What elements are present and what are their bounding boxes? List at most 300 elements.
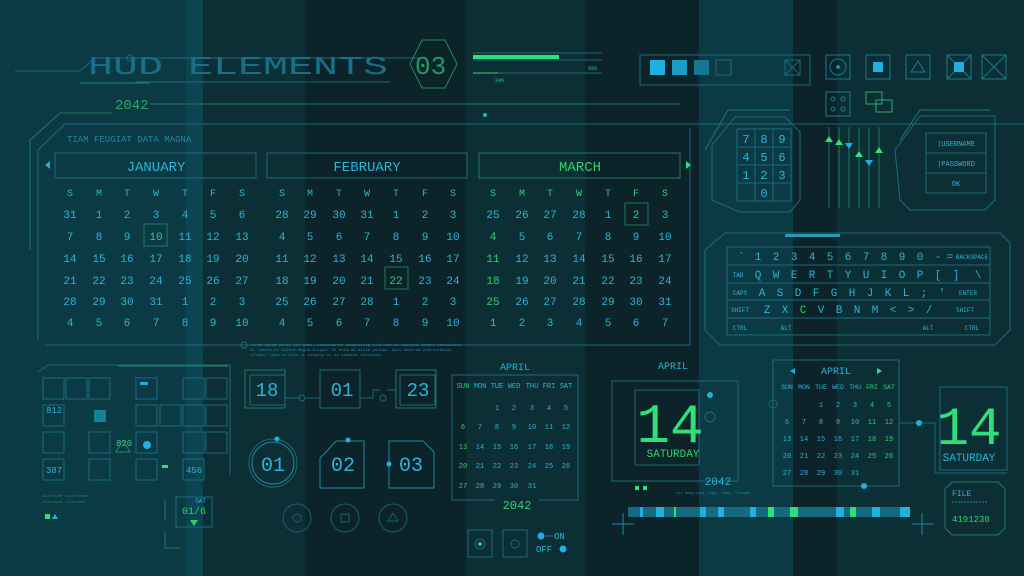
april calendar right: 19 bbox=[885, 436, 893, 444]
keyboard: 2 bbox=[773, 252, 779, 264]
april mini calendar center: 24 bbox=[528, 463, 536, 471]
april calendar right: 2 bbox=[836, 402, 840, 410]
day grid text: 15 bbox=[601, 254, 615, 266]
day grid text: 5 bbox=[307, 318, 313, 330]
day grid text: 25 bbox=[486, 297, 500, 309]
title: 03 bbox=[415, 52, 446, 82]
april mini calendar center: SAT bbox=[560, 383, 572, 391]
day grid text: 26 bbox=[515, 210, 529, 222]
keyboard: ALT bbox=[781, 325, 792, 332]
day grid text: 11 bbox=[178, 232, 192, 244]
keyboard: ` bbox=[738, 251, 744, 264]
keyboard: \ bbox=[975, 270, 981, 282]
day grid text: 1 bbox=[490, 318, 497, 330]
april mini calendar center: 22 bbox=[493, 463, 501, 471]
keypad: 2 bbox=[760, 169, 768, 183]
day grid text: 23 bbox=[629, 276, 643, 288]
day grid text: 1 bbox=[393, 297, 400, 309]
day grid text: 26 bbox=[303, 297, 317, 309]
grid panel bottom-left: #include <iostream> bbox=[43, 494, 89, 499]
keypad: 3 bbox=[778, 169, 786, 183]
sliders bbox=[825, 127, 883, 208]
day grid text: W bbox=[576, 189, 582, 200]
keypad bbox=[705, 110, 800, 212]
day grid text: 26 bbox=[515, 297, 529, 309]
day grid text: 27 bbox=[543, 297, 557, 309]
grid panel bottom-left: 820 bbox=[116, 439, 132, 449]
day grid text: 7 bbox=[364, 318, 370, 330]
date panel 14 saturday right: SATURDAY bbox=[943, 453, 996, 465]
april mini calendar center: FRI bbox=[543, 383, 555, 391]
day grid text: 8 bbox=[393, 318, 399, 330]
keyboard: P bbox=[917, 270, 924, 282]
file box bbox=[945, 482, 1005, 535]
april mini calendar center: WED bbox=[508, 383, 520, 391]
day grid text: 16 bbox=[120, 254, 134, 266]
keypad: 9 bbox=[778, 133, 786, 147]
grid panel bottom-left: 387 bbox=[46, 466, 62, 476]
keyboard: ENTER bbox=[959, 290, 977, 297]
date widget SAT 01/6: SAT bbox=[195, 498, 206, 505]
keyboard: W bbox=[773, 270, 780, 282]
april mini calendar center: 15 bbox=[493, 444, 501, 452]
day grid text: 10 bbox=[658, 232, 672, 244]
keyboard: ; bbox=[921, 288, 927, 300]
day grid text: 18 bbox=[486, 276, 500, 288]
april calendar right: WED bbox=[832, 384, 844, 391]
keyboard bbox=[705, 233, 1010, 345]
day grid text: 2 bbox=[124, 210, 130, 222]
day grid text: 25 bbox=[178, 276, 192, 288]
day grid text: 27 bbox=[235, 276, 249, 288]
barcode strip bbox=[612, 507, 934, 535]
day grid text: S bbox=[662, 189, 668, 200]
april calendar right: 21 bbox=[800, 453, 808, 461]
april calendar right: 8 bbox=[819, 419, 823, 427]
day grid text: 9 bbox=[422, 318, 428, 330]
keyboard: ' bbox=[939, 288, 945, 300]
day grid text: 25 bbox=[275, 297, 289, 309]
day grid text: 18 bbox=[178, 254, 192, 266]
year label 2042: 2042 bbox=[115, 98, 149, 114]
keyboard: 5 bbox=[827, 252, 833, 264]
month headers bbox=[55, 153, 680, 178]
april calendar right: 16 bbox=[834, 436, 842, 444]
calendar panel: three months bbox=[45, 128, 691, 345]
month headers: FEBRUARY bbox=[333, 160, 401, 176]
day grid text bbox=[63, 189, 672, 330]
day grid text: 11 bbox=[275, 254, 289, 266]
day grid text: 10 bbox=[446, 232, 460, 244]
highlight boxes bbox=[144, 203, 648, 289]
april calendar right: 26 bbox=[885, 453, 893, 461]
login panel: |PASSWORD bbox=[937, 161, 975, 169]
day grid text: 7 bbox=[364, 232, 370, 244]
april calendar right: 30 bbox=[834, 470, 842, 478]
april calendar right: 18 bbox=[868, 436, 876, 444]
keyboard: CAPS bbox=[733, 290, 748, 297]
day grid text: 15 bbox=[389, 254, 403, 266]
day grid text: 29 bbox=[92, 297, 106, 309]
day grid text: 30 bbox=[629, 297, 643, 309]
keyboard: E bbox=[791, 270, 798, 282]
keyboard: / bbox=[926, 305, 932, 317]
april mini calendar center: 13 bbox=[459, 444, 467, 452]
toggle ON OFF bbox=[468, 530, 566, 557]
login panel: |USERNAME bbox=[937, 141, 975, 149]
date panel 14 saturday left: SATURDAY bbox=[647, 449, 700, 461]
april calendar right: 13 bbox=[783, 436, 791, 444]
day grid text: 30 bbox=[120, 297, 134, 309]
day grid text: 5 bbox=[307, 232, 313, 244]
day grid text: 3 bbox=[662, 210, 668, 222]
day grid text: 17 bbox=[149, 254, 163, 266]
day grid text: 4 bbox=[279, 232, 286, 244]
date panel 14 saturday left: APRIL bbox=[658, 362, 688, 373]
day grid text: 8 bbox=[605, 232, 611, 244]
day grid text: 9 bbox=[124, 232, 130, 244]
day grid text: M bbox=[519, 189, 525, 200]
day grid text: 1 bbox=[182, 297, 189, 309]
day grid text: 9 bbox=[422, 232, 428, 244]
day grid text: M bbox=[96, 189, 102, 200]
keyboard: BACKSPACE bbox=[956, 254, 989, 261]
day grid text: 22 bbox=[389, 276, 403, 288]
april mini calendar center: 27 bbox=[459, 483, 467, 491]
day grid text: 21 bbox=[360, 276, 374, 288]
title bbox=[15, 40, 457, 88]
keypad: 5 bbox=[760, 151, 768, 165]
grid panel bottom-left bbox=[38, 365, 230, 519]
keyboard: J bbox=[867, 288, 873, 300]
time boxes 18 01 23: 18 bbox=[256, 380, 278, 402]
day grid text: 19 bbox=[206, 254, 220, 266]
day grid text: 8 bbox=[393, 232, 399, 244]
april mini calendar center: 18 bbox=[545, 444, 553, 452]
toggle ON OFF: OFF bbox=[536, 545, 552, 555]
keyboard: H bbox=[849, 288, 855, 300]
day grid text: 31 bbox=[360, 210, 374, 222]
grid panel bottom-left: #include <fstream> bbox=[43, 500, 87, 505]
april calendar right bbox=[769, 360, 899, 489]
april mini calendar center: TUE bbox=[491, 383, 503, 391]
day grid text: S bbox=[279, 189, 285, 200]
day grid text: 8 bbox=[182, 318, 188, 330]
day grid text: 3 bbox=[450, 210, 456, 222]
day grid text: 24 bbox=[149, 276, 163, 288]
keyboard: B bbox=[836, 305, 843, 317]
keyboard: CTRL bbox=[733, 325, 748, 332]
keyboard: F bbox=[813, 288, 819, 300]
april calendar right: 23 bbox=[834, 453, 842, 461]
day grid text: 13 bbox=[332, 254, 346, 266]
day grid text: 14 bbox=[360, 254, 374, 266]
keyboard: X bbox=[782, 305, 789, 317]
day grid text: 4 bbox=[576, 318, 583, 330]
date widget SAT 01/6: 01/6 bbox=[182, 506, 206, 518]
day grid text: 20 bbox=[543, 276, 557, 288]
day grid text: 7 bbox=[576, 232, 582, 244]
keyboard: Q bbox=[755, 270, 762, 282]
day grid text: 31 bbox=[658, 297, 672, 309]
april calendar right: SUN bbox=[781, 384, 793, 391]
april mini calendar center: APRIL bbox=[500, 363, 530, 374]
april calendar right: 14 bbox=[800, 436, 808, 444]
day grid text: 10 bbox=[235, 318, 249, 330]
april calendar right: 17 bbox=[851, 436, 859, 444]
april mini calendar center: 14 bbox=[476, 444, 484, 452]
day grid text: 24 bbox=[446, 276, 460, 288]
keyboard: 0 bbox=[917, 252, 923, 264]
april calendar right: 27 bbox=[783, 470, 791, 478]
day grid text: 7 bbox=[67, 232, 73, 244]
lorem text block: ullamco laboris nisi ut aliquip ex ea commodo consequat bbox=[250, 353, 382, 358]
feb: 28 bbox=[275, 210, 289, 222]
day grid text: 6 bbox=[336, 318, 342, 330]
day grid text: 13 bbox=[235, 232, 249, 244]
keyboard: Z bbox=[764, 305, 771, 317]
day grid text: 26 bbox=[206, 276, 220, 288]
counters 01 02 03: 03 bbox=[399, 455, 423, 478]
day grid text: W bbox=[364, 189, 370, 200]
day grid text: 17 bbox=[658, 254, 672, 266]
day grid text: 3 bbox=[450, 297, 456, 309]
day grid text: 28 bbox=[572, 297, 586, 309]
day grid text: 17 bbox=[446, 254, 460, 266]
keyboard: I bbox=[881, 270, 887, 282]
day grid text: S bbox=[490, 189, 496, 200]
progress bars bbox=[473, 53, 602, 84]
day grid text: 3 bbox=[153, 210, 159, 222]
grid panel bottom-left: 456 bbox=[186, 466, 202, 476]
day grid text: F bbox=[210, 189, 216, 200]
month headers: MARCH bbox=[559, 160, 601, 176]
keypad: 1 bbox=[742, 169, 750, 183]
day grid text: 4 bbox=[490, 232, 497, 244]
day grid text: 21 bbox=[572, 276, 586, 288]
april calendar right: 29 bbox=[817, 470, 825, 478]
day grid text: T bbox=[124, 189, 130, 200]
april mini calendar center: 30 bbox=[510, 483, 518, 491]
day grid text: 12 bbox=[303, 254, 317, 266]
calendar panel: three months: TIAM FEUGIAT DATA MAGNA bbox=[67, 135, 192, 145]
time boxes 18 01 23 bbox=[245, 370, 436, 408]
day grid text: 27 bbox=[543, 210, 557, 222]
file box: 4191230 bbox=[952, 515, 990, 525]
day grid text: 1 bbox=[605, 210, 612, 222]
day grid text: 23 bbox=[418, 276, 432, 288]
april calendar right: 24 bbox=[851, 453, 859, 461]
keyboard: = bbox=[947, 252, 953, 264]
day grid text: 2 bbox=[422, 210, 428, 222]
april mini calendar center: 21 bbox=[476, 463, 484, 471]
april mini calendar center: 28 bbox=[476, 483, 484, 491]
keyboard: - bbox=[935, 252, 941, 264]
day grid text: T bbox=[547, 189, 553, 200]
day grid text: 6 bbox=[633, 318, 639, 330]
login panel bbox=[895, 110, 995, 210]
day grid text: 4 bbox=[182, 210, 189, 222]
day grid text: 14 bbox=[63, 254, 77, 266]
keyboard: TAB bbox=[733, 272, 744, 279]
day grid text: 29 bbox=[601, 297, 615, 309]
keyboard: 9 bbox=[899, 252, 905, 264]
april mini calendar center: 8 bbox=[495, 424, 499, 432]
keyboard: N bbox=[854, 305, 860, 317]
april calendar right: 12 bbox=[885, 419, 893, 427]
keyboard: 8 bbox=[881, 252, 887, 264]
day grid text: 6 bbox=[124, 318, 130, 330]
keypad: 4 bbox=[742, 151, 750, 165]
april mini calendar center: 26 bbox=[562, 463, 570, 471]
day grid text: 2 bbox=[422, 297, 428, 309]
day grid text: 18 bbox=[275, 276, 289, 288]
day grid text: 14 bbox=[572, 254, 586, 266]
day grid text: 28 bbox=[63, 297, 77, 309]
day grid text: W bbox=[153, 189, 159, 200]
toggle ON OFF: ON bbox=[554, 532, 565, 542]
day grid text: 7 bbox=[662, 318, 668, 330]
april mini calendar center: 2042 bbox=[503, 499, 531, 513]
april mini calendar center: 16 bbox=[510, 444, 518, 452]
april mini calendar center: 25 bbox=[545, 463, 553, 471]
april mini calendar center bbox=[452, 363, 578, 513]
day grid text: 5 bbox=[96, 318, 102, 330]
day grid text: 15 bbox=[92, 254, 106, 266]
day grid text: 1 bbox=[96, 210, 103, 222]
april mini calendar center: 23 bbox=[510, 463, 518, 471]
day grid text: 19 bbox=[515, 276, 529, 288]
april calendar right: 31 bbox=[851, 470, 859, 478]
keyboard: S bbox=[777, 288, 784, 300]
april calendar right: 10 bbox=[851, 419, 859, 427]
keyboard: 6 bbox=[845, 252, 851, 264]
keyboard: SHIFT bbox=[956, 307, 974, 314]
day grid text: 10 bbox=[446, 318, 460, 330]
april calendar right: 9 bbox=[836, 419, 840, 427]
day grid text: 6 bbox=[239, 210, 245, 222]
keyboard: CTRL bbox=[965, 325, 980, 332]
day grid text: 2 bbox=[519, 318, 525, 330]
date panel 14 saturday left: 2042 bbox=[705, 477, 731, 489]
lorem text block: Lorem ipsum dolor sit amet, consectetur adipiscing elit sed do eiusmod tempor incididunt bbox=[250, 343, 461, 348]
day grid text: 5 bbox=[519, 232, 525, 244]
april mini calendar center: 19 bbox=[562, 444, 570, 452]
keyboard: [ bbox=[935, 270, 941, 282]
day grid text: T bbox=[336, 189, 342, 200]
april mini calendar center: 9 bbox=[512, 424, 516, 432]
progress bars: 24% bbox=[495, 78, 504, 84]
keyboard: D bbox=[795, 288, 802, 300]
keypad: 8 bbox=[760, 133, 768, 147]
year label 2042 bbox=[30, 98, 1024, 340]
day grid text: 30 bbox=[332, 210, 346, 222]
keypad: 0 bbox=[760, 187, 768, 201]
april mini calendar center: THU bbox=[526, 383, 538, 391]
round icons bbox=[283, 504, 407, 532]
keyboard: 4 bbox=[809, 252, 816, 264]
progress bars: 59% bbox=[588, 66, 597, 72]
april mini calendar center: MON bbox=[474, 383, 486, 391]
april calendar right: 22 bbox=[817, 453, 825, 461]
day grid text: 28 bbox=[360, 297, 374, 309]
keyboard: 7 bbox=[863, 252, 869, 264]
jan: 31 bbox=[63, 210, 77, 222]
day grid text: 10 bbox=[149, 232, 163, 244]
day grid text: 11 bbox=[486, 254, 500, 266]
date panel 14 saturday left: sit meglivsi sign, ibes "fhugut bbox=[676, 491, 750, 496]
april mini calendar center: 5 bbox=[564, 405, 568, 413]
day grid text: 12 bbox=[515, 254, 529, 266]
april calendar right: 20 bbox=[783, 453, 791, 461]
lorem text block bbox=[241, 342, 461, 358]
keyboard: ALT bbox=[923, 325, 934, 332]
top squares strip bbox=[640, 55, 810, 85]
day grid text: 2 bbox=[210, 297, 216, 309]
april mini calendar center: 12 bbox=[562, 424, 570, 432]
keypad: 6 bbox=[778, 151, 786, 165]
day grid text: 20 bbox=[235, 254, 249, 266]
april mini calendar center: 11 bbox=[545, 424, 553, 432]
day grid text: 16 bbox=[418, 254, 432, 266]
day grid text: S bbox=[450, 189, 456, 200]
april mini calendar center: 20 bbox=[459, 463, 467, 471]
login panel: OK bbox=[952, 181, 961, 189]
day grid text: 7 bbox=[153, 318, 159, 330]
file box: FILE bbox=[952, 490, 971, 499]
april calendar right: 4 bbox=[870, 402, 874, 410]
time boxes 18 01 23: 23 bbox=[407, 380, 429, 402]
april mini calendar center: 6 bbox=[461, 424, 465, 432]
date widget SAT 01/6 bbox=[165, 497, 212, 548]
day grid text: 28 bbox=[572, 210, 586, 222]
keyboard: < bbox=[890, 305, 896, 317]
day grid text: 23 bbox=[120, 276, 134, 288]
title: HUD ELEMENTS bbox=[88, 52, 388, 82]
date panel 14 saturday left bbox=[612, 362, 750, 496]
day grid text: 24 bbox=[658, 276, 672, 288]
day grid text: 22 bbox=[601, 276, 615, 288]
day grid text: T bbox=[182, 189, 188, 200]
april calendar right: APRIL bbox=[821, 367, 851, 378]
day grid text: 9 bbox=[210, 318, 216, 330]
counters 01 02 03 bbox=[249, 436, 434, 488]
keypad: 7 bbox=[742, 133, 750, 147]
april calendar right: FRI bbox=[866, 384, 878, 391]
day grid text: 22 bbox=[92, 276, 106, 288]
keyboard: T bbox=[827, 270, 834, 282]
april mini calendar center: 4 bbox=[547, 405, 551, 413]
day grid text: 9 bbox=[633, 232, 639, 244]
april calendar right: 6 bbox=[785, 419, 789, 427]
april mini calendar center: 1 bbox=[495, 405, 499, 413]
day grid text: T bbox=[393, 189, 399, 200]
day grid text: S bbox=[239, 189, 245, 200]
keyboard: L bbox=[903, 288, 909, 300]
keyboard: V bbox=[818, 305, 825, 317]
day grid text: 13 bbox=[543, 254, 557, 266]
april calendar right: 7 bbox=[802, 419, 806, 427]
time boxes 18 01 23: 01 bbox=[331, 380, 353, 402]
keyboard: R bbox=[809, 270, 816, 282]
date panel 14 saturday left: 14 bbox=[636, 395, 704, 459]
keyboard: K bbox=[885, 288, 892, 300]
april calendar right: MON bbox=[798, 384, 810, 391]
date panel 14 saturday right: 14 bbox=[937, 400, 1001, 461]
april calendar right: 1 bbox=[819, 402, 823, 410]
april calendar right: THU bbox=[849, 384, 861, 391]
date panel 14 saturday right bbox=[899, 387, 1007, 473]
